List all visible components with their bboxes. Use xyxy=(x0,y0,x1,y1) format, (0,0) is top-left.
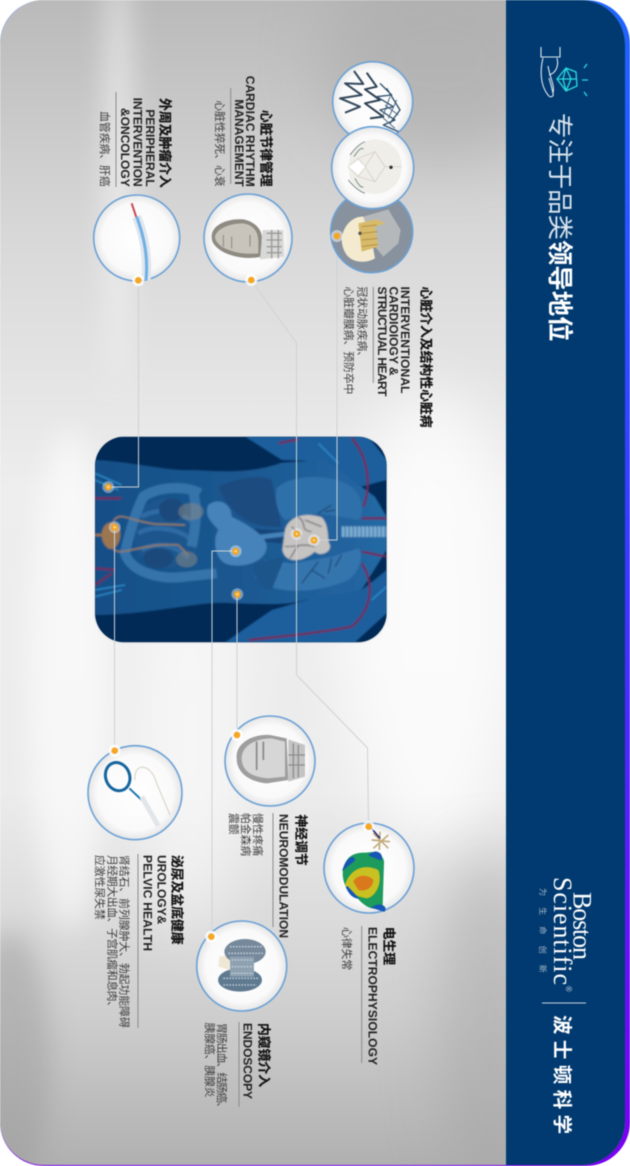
device: peripheral catheter xyxy=(94,195,180,281)
text block: neuromodulation: 帕金森病 xyxy=(239,813,253,856)
text block: peripheral intervention and oncology xyxy=(98,92,172,188)
text block: urology and pelvic health: PELVIC HEALTH xyxy=(140,855,154,951)
device: coronary stent xyxy=(333,62,413,142)
text block: cardiac rhythm management: 心脏节律管理 xyxy=(258,110,274,187)
text block: interventional cardiology and structural heart: 冠状动脉疾病、 xyxy=(356,286,370,362)
text block: interventional cardiology and structural heart: CARDIOIOGY & xyxy=(386,286,400,376)
anatomy panel xyxy=(94,435,388,644)
liver xyxy=(218,477,282,527)
logo: Boston Scientific xyxy=(548,877,596,992)
logo: Boston Scientific: Scientific xyxy=(548,877,577,985)
text block: electrophysiology xyxy=(340,926,396,1065)
device: cardiac rhythm generator xyxy=(204,194,292,282)
upper lung xyxy=(276,477,362,520)
marker: cardiac rhythm xyxy=(245,274,257,286)
text block: interventional cardiology and structural heart: INTERVENTIONAL xyxy=(398,286,412,394)
brand divider xyxy=(542,1002,586,1004)
lower lung xyxy=(272,548,361,592)
text block: urology and pelvic health: 泌尿及盆底健康 xyxy=(170,855,184,945)
text block: endoscopy xyxy=(203,1022,272,1113)
stomach xyxy=(207,501,267,566)
marker: endoscopy xyxy=(205,931,217,943)
text block: interventional cardiology and structural heart: 心脏瓣膜病、预防卒中 xyxy=(342,286,356,394)
text block: peripheral intervention and oncology: INTERVENTION xyxy=(130,98,144,187)
text block: urology and pelvic health: UROLOGY& xyxy=(154,855,168,925)
text block: interventional cardiology and structural heart xyxy=(342,286,434,428)
kidneys and ureters xyxy=(178,503,204,520)
text block: cardiac rhythm management: CARDIAC RHYTHM xyxy=(243,76,257,187)
device: urology loop xyxy=(88,746,182,840)
marker: structural heart xyxy=(331,230,343,242)
text block: peripheral intervention and oncology: PERIPHERAL xyxy=(143,109,157,187)
spine xyxy=(340,525,387,538)
logo: Boston Scientific: ® xyxy=(564,986,573,992)
device: neuromodulation generator xyxy=(225,716,315,806)
text block: peripheral intervention and oncology: &ONCOLOGY xyxy=(118,108,132,187)
text block: electrophysiology: 心律失常 xyxy=(340,927,353,970)
text block: endoscopy: 胰腺癌、胰腺炎 xyxy=(203,1022,217,1098)
heart xyxy=(282,515,330,560)
text block: peripheral intervention and oncology: 外周及肿瘤介入 xyxy=(158,98,172,188)
marker: electrophysiology xyxy=(363,821,375,833)
icon: hand holding diamond xyxy=(541,47,588,97)
tagline: 为生命创新 xyxy=(538,888,548,984)
text block: peripheral intervention and oncology: 血管疾病、肝癌 xyxy=(98,111,112,187)
text block: electrophysiology: ELECTROPHYSIOLOGY xyxy=(366,927,380,1065)
text block: urology and pelvic health: 月经期大出血、子宫肌瘤和息肉、 xyxy=(106,855,120,1012)
text block: endoscopy: ENDOSCOPY xyxy=(240,1023,254,1099)
text block: neuromodulation: 神经调节 xyxy=(294,814,308,866)
text block: urology and pelvic health: 肾结石、前列腺肿大、勃起功能障碍 xyxy=(118,855,132,1028)
text block: cardiac rhythm management: MANAGEMENT xyxy=(232,99,246,187)
heading: leadership in categories: 专注于品类 领导地位 xyxy=(545,113,574,342)
text block: interventional cardiology and structural heart: 心脏介入及结构性心脏病 xyxy=(418,286,434,428)
marker: urology xyxy=(109,745,121,757)
marker: peripheral xyxy=(132,274,144,286)
torso xyxy=(95,460,387,615)
device: electrophysiology map xyxy=(324,823,414,913)
text block: interventional cardiology and structural heart: STRUCTUAL HEART xyxy=(375,286,389,397)
veins and nerves xyxy=(95,438,387,640)
navy brand panel xyxy=(506,0,625,1165)
connector lines xyxy=(108,236,368,936)
text block: neuromodulation: 震颤 xyxy=(227,813,241,835)
company name: 波士顿科学 xyxy=(550,1015,574,1140)
body markers xyxy=(102,481,320,600)
device: left atrial appendage closure xyxy=(331,191,413,273)
text block: neuromodulation: 慢性疼痛 xyxy=(251,813,265,856)
bladder xyxy=(102,522,120,549)
text block: endoscopy: 胃肠出血、结肠癌、 xyxy=(215,1023,229,1113)
text block: endoscopy: 内窥镜介入 xyxy=(256,1023,272,1087)
text block: electrophysiology: 电生理 xyxy=(382,927,396,965)
text block: neuromodulation: NEUROMODULATION xyxy=(276,814,290,938)
text block: urology and pelvic health xyxy=(93,854,184,1028)
marker: neuromodulation xyxy=(231,729,243,741)
bronchial tree xyxy=(302,505,342,583)
text block: cardiac rhythm management: 心脏性猝死、心衰 xyxy=(213,100,227,187)
large intestine xyxy=(125,488,217,577)
logo: Boston Scientific: Boston xyxy=(568,892,596,960)
arms xyxy=(245,437,387,487)
device: endoscopy stent xyxy=(197,921,287,1011)
text block: neuromodulation xyxy=(227,813,308,938)
device: heart valve xyxy=(332,127,414,209)
small intestine xyxy=(133,498,200,568)
text block: cardiac rhythm management xyxy=(213,76,274,187)
text block: urology and pelvic health: 应激性尿失禁 xyxy=(93,855,107,920)
